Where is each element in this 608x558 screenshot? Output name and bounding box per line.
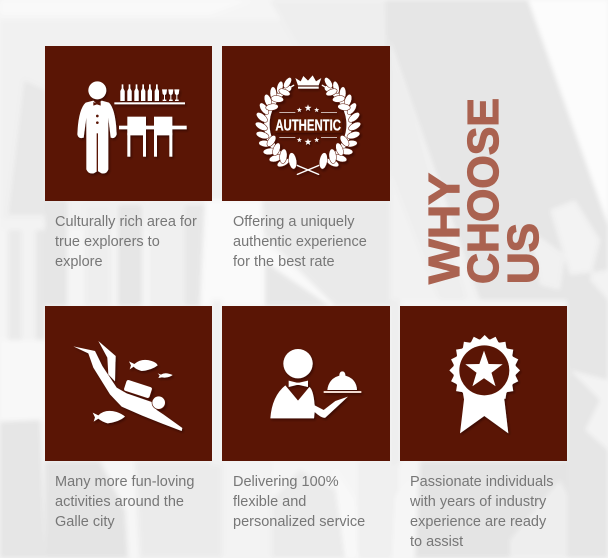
caption: fun-loving activities [55, 474, 194, 530]
icon: scuba diver and fish [45, 306, 212, 461]
caption: flexible personalized service [233, 474, 365, 530]
title: why choose us: US [499, 223, 548, 284]
caption: passionate individuals: to assist [410, 534, 463, 550]
icon: waiter at bar [45, 46, 212, 201]
icon: authentic laurel badge [222, 46, 390, 201]
caption: culturally rich area: true explorers to [55, 234, 160, 250]
caption: authentic experience: authentic experience [233, 234, 367, 250]
title: why choose us: WHY [420, 173, 469, 284]
caption: flexible personalized service: Delivering 100% [233, 474, 339, 490]
icon: authentic laurel badge: AUTHENTIC [275, 118, 341, 135]
caption: fun-loving activities: activities around the [55, 494, 184, 510]
panel: culturally rich area [45, 46, 212, 270]
panel: passionate individuals [400, 306, 567, 550]
title: why choose us [420, 98, 548, 285]
caption: passionate individuals: Passionate individuals [410, 474, 553, 490]
caption: passionate individuals: experience are ready [410, 514, 546, 530]
caption: authentic experience: Offering a uniquely [233, 214, 354, 230]
caption: authentic experience: for the best rate [233, 254, 335, 270]
caption: passionate individuals: with years of industry [410, 494, 546, 510]
panel: fun-loving activities [45, 306, 212, 530]
title: why choose us: CHOOSE [459, 98, 508, 284]
caption: flexible personalized service: flexible and [233, 494, 306, 510]
caption: passionate individuals [410, 474, 553, 550]
icon: waiter with cloche tray [222, 306, 390, 461]
caption: authentic experience [233, 214, 367, 270]
caption: flexible personalized service: personalized service [233, 514, 365, 530]
panel: authentic experience [222, 46, 390, 270]
panel: flexible personalized service [222, 306, 390, 530]
caption: fun-loving activities: Many more fun-loving [55, 474, 194, 490]
caption: fun-loving activities: Galle city [55, 514, 115, 530]
caption: culturally rich area [55, 214, 197, 270]
caption: culturally rich area: Culturally rich area for [55, 214, 197, 230]
caption: culturally rich area: explore [55, 254, 103, 270]
icon: award rosette with star [400, 306, 567, 461]
